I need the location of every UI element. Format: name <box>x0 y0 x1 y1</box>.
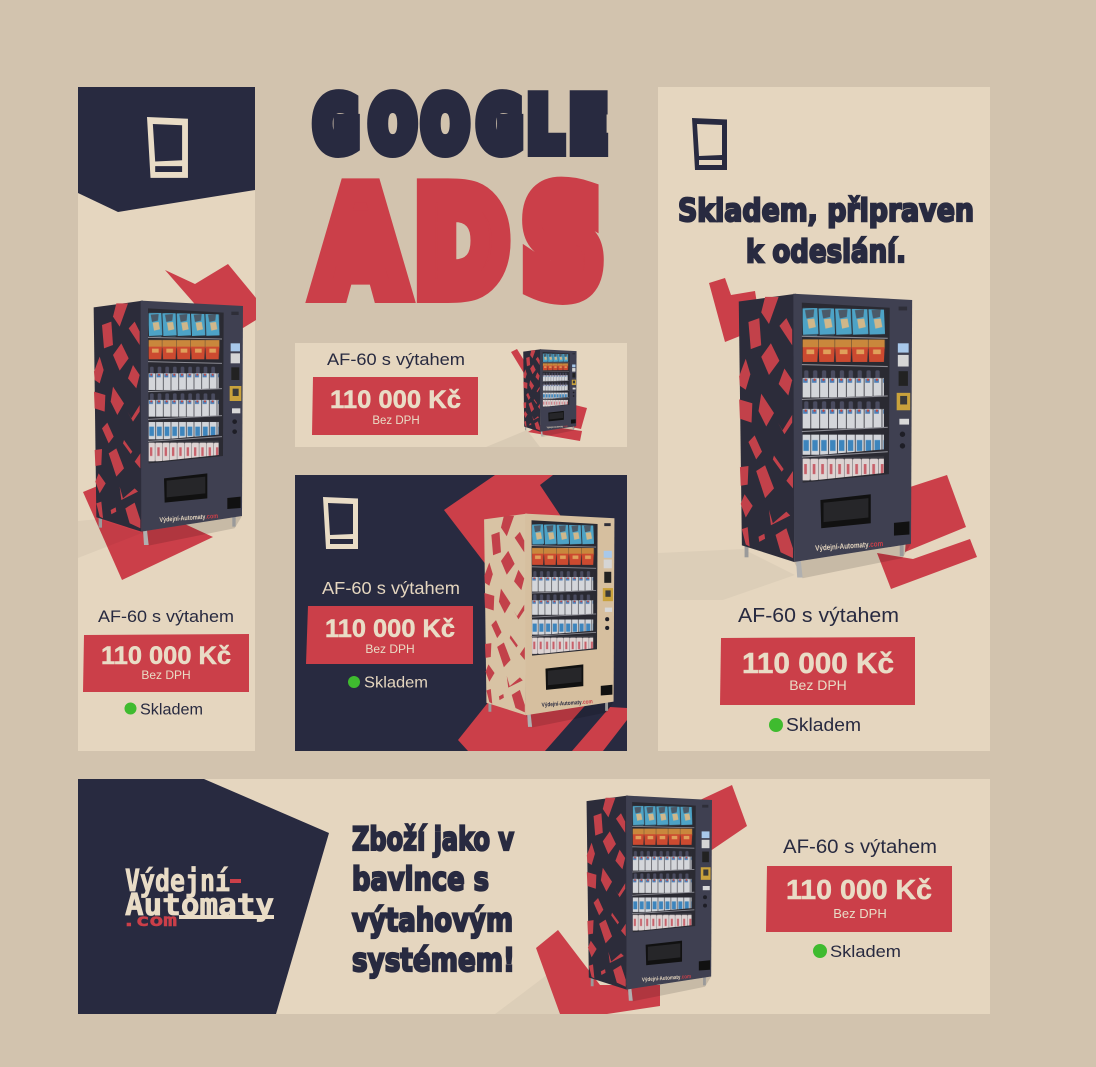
vending machine beige <box>484 514 614 727</box>
shadow <box>486 430 540 447</box>
product name: AF-60 s výtahem <box>322 578 460 598</box>
shadow <box>658 549 795 600</box>
headline: k odeslání. <box>746 234 906 270</box>
shadow <box>495 965 600 1014</box>
panel: skyscraper banner <box>78 87 256 751</box>
price box: Bez DPH <box>365 642 415 656</box>
stock status: Skladem <box>140 702 203 718</box>
logo: Výdejní-Automaty.com: Automaty <box>125 888 274 923</box>
headline <box>678 193 974 270</box>
panel: tall right banner <box>658 87 990 751</box>
red shapes <box>511 349 587 441</box>
icon: vending machine outline <box>692 118 727 170</box>
price box <box>312 377 478 435</box>
logo panel <box>78 779 329 1014</box>
red shapes <box>709 278 977 589</box>
red shapes <box>444 475 627 751</box>
headline <box>352 820 515 979</box>
stock status: Skladem <box>786 715 861 735</box>
vending machine <box>587 796 712 1001</box>
logo: Výdejní-Automaty.com: .com <box>122 911 177 931</box>
logo: Výdejní-Automaty.com: Výdejní <box>125 864 230 899</box>
shadow <box>78 519 142 558</box>
price box: 110 000 Kč <box>330 386 461 414</box>
product name: AF-60 s výtahem <box>327 350 465 369</box>
title word: Google: GOOGLE <box>314 84 607 168</box>
vending machine <box>94 301 243 546</box>
title word: Ads: ADS <box>318 164 602 324</box>
headline: bavlnce s <box>352 860 489 898</box>
price box: 110 000 Kč <box>786 874 932 905</box>
title: Google Ads <box>314 84 607 324</box>
panel: leaderboard price banner <box>295 343 627 447</box>
price box <box>306 606 473 664</box>
headline: Zboží jako v <box>352 820 514 858</box>
price box: 110 000 Kč <box>742 648 894 680</box>
vending machine <box>523 349 577 437</box>
price box: 110 000 Kč <box>101 642 231 670</box>
price box: Bez DPH <box>372 415 420 427</box>
price box <box>83 634 249 692</box>
red shapes behind machine <box>83 264 256 580</box>
price box: 110 000 Kč <box>325 615 455 643</box>
price box: Bez DPH <box>141 668 191 682</box>
price box: Bez DPH <box>789 677 847 693</box>
icon: vending machine outline <box>147 117 188 178</box>
headline: výtahovým <box>352 901 513 939</box>
panel: square navy banner <box>295 475 627 751</box>
headline: systémem! <box>352 941 515 979</box>
panel: wide bottom banner <box>78 779 990 1014</box>
header shape <box>78 87 255 212</box>
price box: Bez DPH <box>833 906 887 921</box>
icon: vending machine outline <box>323 497 358 549</box>
price box <box>766 866 952 932</box>
product name: AF-60 s výtahem <box>98 607 234 626</box>
price box <box>720 637 915 705</box>
stock status: Skladem <box>830 942 901 961</box>
product name: AF-60 s výtahem <box>738 605 899 627</box>
stock status: Skladem <box>364 674 428 692</box>
product name: AF-60 s výtahem <box>783 837 937 858</box>
headline: Skladem, připraven <box>678 193 974 229</box>
logo: Výdejní-Automaty.com <box>122 864 274 931</box>
red shapes <box>536 785 747 1014</box>
vending machine <box>739 294 912 578</box>
